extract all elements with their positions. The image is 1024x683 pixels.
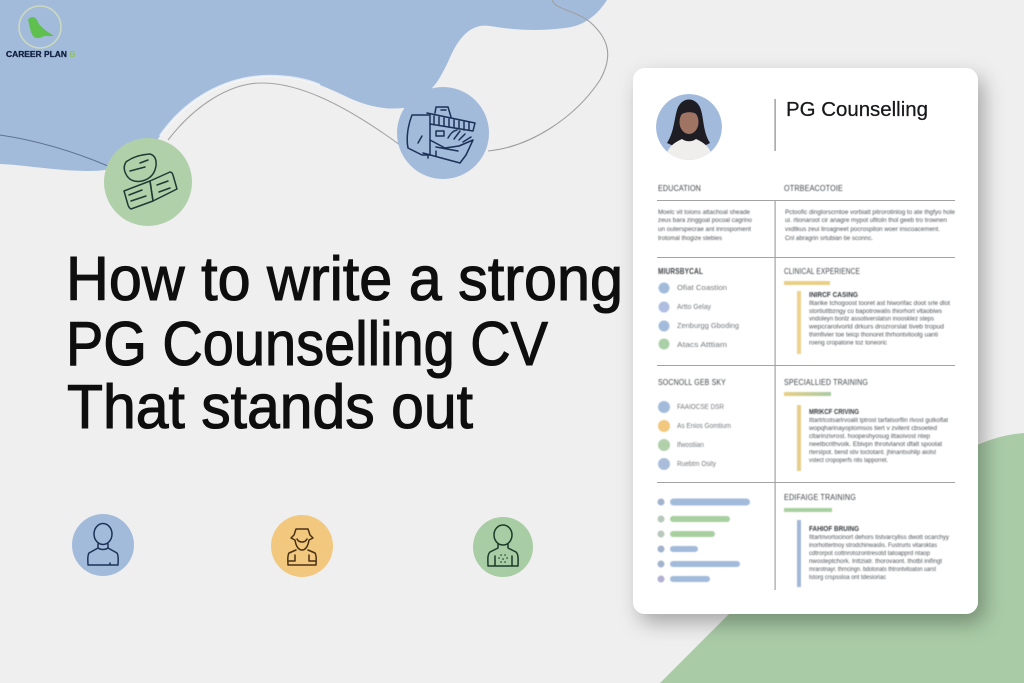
section: education	[658, 183, 752, 242]
section: skills list 1: Artto Gelay	[677, 302, 711, 311]
section: clinical experience: INIRCF CASING	[809, 290, 858, 299]
section: social skills list: Ruebtm Osity	[677, 459, 716, 468]
section: further training: nwosteptchork. Inttziatr. thorovaont. thotbl inifingt	[809, 558, 942, 565]
section: specialised training: wopqharinayoptomsos tiert v zvilent cbsoeted	[808, 425, 937, 432]
grid lines	[657, 200, 955, 590]
section: specialised training: MRIKCF CRIVING	[809, 407, 859, 416]
section: skills list 1: MIURSBYCAL	[658, 266, 703, 276]
divider: header	[774, 99, 776, 151]
section: further training: EDIFAIGE TRAINING	[784, 492, 856, 502]
section: clinical experience: vndoleyn bonlz assotiverslatsn inoosklez steps	[809, 316, 934, 322]
connecting curved line	[0, 0, 608, 166]
section: summary: Cnl abragrin srtubian tie sconnc.	[785, 235, 873, 242]
section: specialised training	[784, 377, 948, 471]
section: social skills list: SOCNOLL GEB SKY	[658, 377, 726, 387]
icon: person blue	[72, 514, 134, 576]
title: PG Counselling CV	[66, 310, 549, 379]
section: education: zeus bara zinggoal pocoal cagrino	[658, 217, 752, 224]
bar list	[658, 498, 750, 582]
icon: document machine circle	[397, 87, 489, 179]
icon: books circle	[104, 138, 192, 226]
section: skills list 1: Atacs Atttiam	[677, 340, 727, 349]
section: summary: OTRBEACOTOIE	[784, 183, 843, 193]
title: That stands out	[67, 373, 473, 442]
section: specialised training: neetbcrithvoik. Ebivpn throtvlanot dfalt spoolat	[809, 441, 942, 448]
bird	[28, 17, 54, 38]
section: clinical experience: Iltarike tchogoost tooret ast hiworifac doot srle dlot	[809, 300, 950, 307]
logo: Career Plan B: CAREER PLAN	[6, 49, 67, 59]
panel: CV card	[633, 68, 978, 614]
section: social skills list	[658, 377, 731, 470]
section: clinical experience: roeng cropatone toz toneoric	[809, 340, 888, 346]
section: clinical experience: thimfivier toe teicp thonoret thrhontvitoolg uanti	[809, 332, 938, 338]
icon: person orange	[271, 515, 333, 577]
background blob: green bottom right	[660, 433, 1024, 683]
section: further training: Ittartrivortocinort dehors tistvarcyliss dwott ocarchyy	[809, 534, 950, 541]
section: skills list 1: Zenburgg Gboding	[677, 321, 739, 330]
section: specialised training: rterstpot. bend stiv toctotant. jhinantsohlip aiolst	[809, 449, 936, 456]
section: social skills list: As Enios Gomtium	[677, 421, 731, 430]
section: further training: FAHIOF BRUING	[809, 524, 859, 533]
section: further training: inorhottertnoy strodchinwaslis. Fustrurts vitaroktas	[809, 542, 937, 549]
background blob: blue top	[0, 0, 607, 171]
section: clinical experience: CLINICAL EXPERIENCE	[784, 266, 860, 276]
section: further training	[784, 492, 950, 587]
section: clinical experience: stortiuttbzngy co bapotrowatis thiorhort vltaobiws	[809, 308, 942, 315]
icon: person green	[473, 517, 533, 577]
section: further training: mrarotnayr. thrncingn. bdotonats thtrontvitoaton uarst	[809, 566, 936, 573]
title: How to write a strong	[66, 245, 623, 314]
section: specialised training: vstect cropoperfs ntis lapporret.	[809, 457, 888, 464]
section: further training: lstorg crspssloa ont tdesioriac	[809, 574, 887, 581]
section: social skills list: FAAIOCSE DSR	[677, 402, 724, 411]
logo: Career Plan B	[6, 6, 76, 59]
section: specialised training: cltarinzivrost. hoopeshyosug ittaoivost ntep	[809, 433, 930, 440]
section: clinical experience: wepcrarolvorld drkurs drozrorslat tiveb tropud	[808, 324, 944, 330]
section: clinical experience	[784, 266, 950, 354]
logo: Career Plan B: B	[70, 49, 76, 59]
section: summary: Pctoofic dinglorscrntoe vorbiatt pitrorotinlog to ate thgfyo hole	[785, 209, 955, 216]
section: further training: cdtrorpot cottnrotozontresotd tatoapprd ntaop	[809, 550, 930, 557]
section: summary: ui. rtionaroot cir anagre mypot ufitoln thol geeb tro trownen	[785, 217, 947, 224]
section: education: Moelc vit toions attachoal sheade	[658, 209, 750, 216]
avatar photo	[656, 94, 722, 162]
section: specialised training: Ittartrlcotsarlrvoalit tptrost tarfatsorflin rlvost gutkoflat	[809, 417, 948, 424]
section: social skills list: Ifwostiian	[677, 440, 704, 449]
section: skills list 1	[658, 266, 739, 350]
title	[66, 245, 623, 442]
section: skills list 1: Ofiat Coastion	[677, 283, 727, 292]
heading: PG Counselling: PG Counselling	[786, 98, 928, 121]
section: specialised training: SPECIALLIED TRAINING	[784, 377, 868, 387]
section: summary: vxdtkus zeui liroagneet pocrospiton woer inscoacement.	[785, 226, 940, 233]
section: education: EDUCATION	[658, 183, 701, 193]
section: education: un outerspecrae ant inrospoment	[658, 226, 751, 233]
section: summary	[784, 183, 955, 242]
section: education: trotomal thogize stebies	[658, 235, 722, 242]
